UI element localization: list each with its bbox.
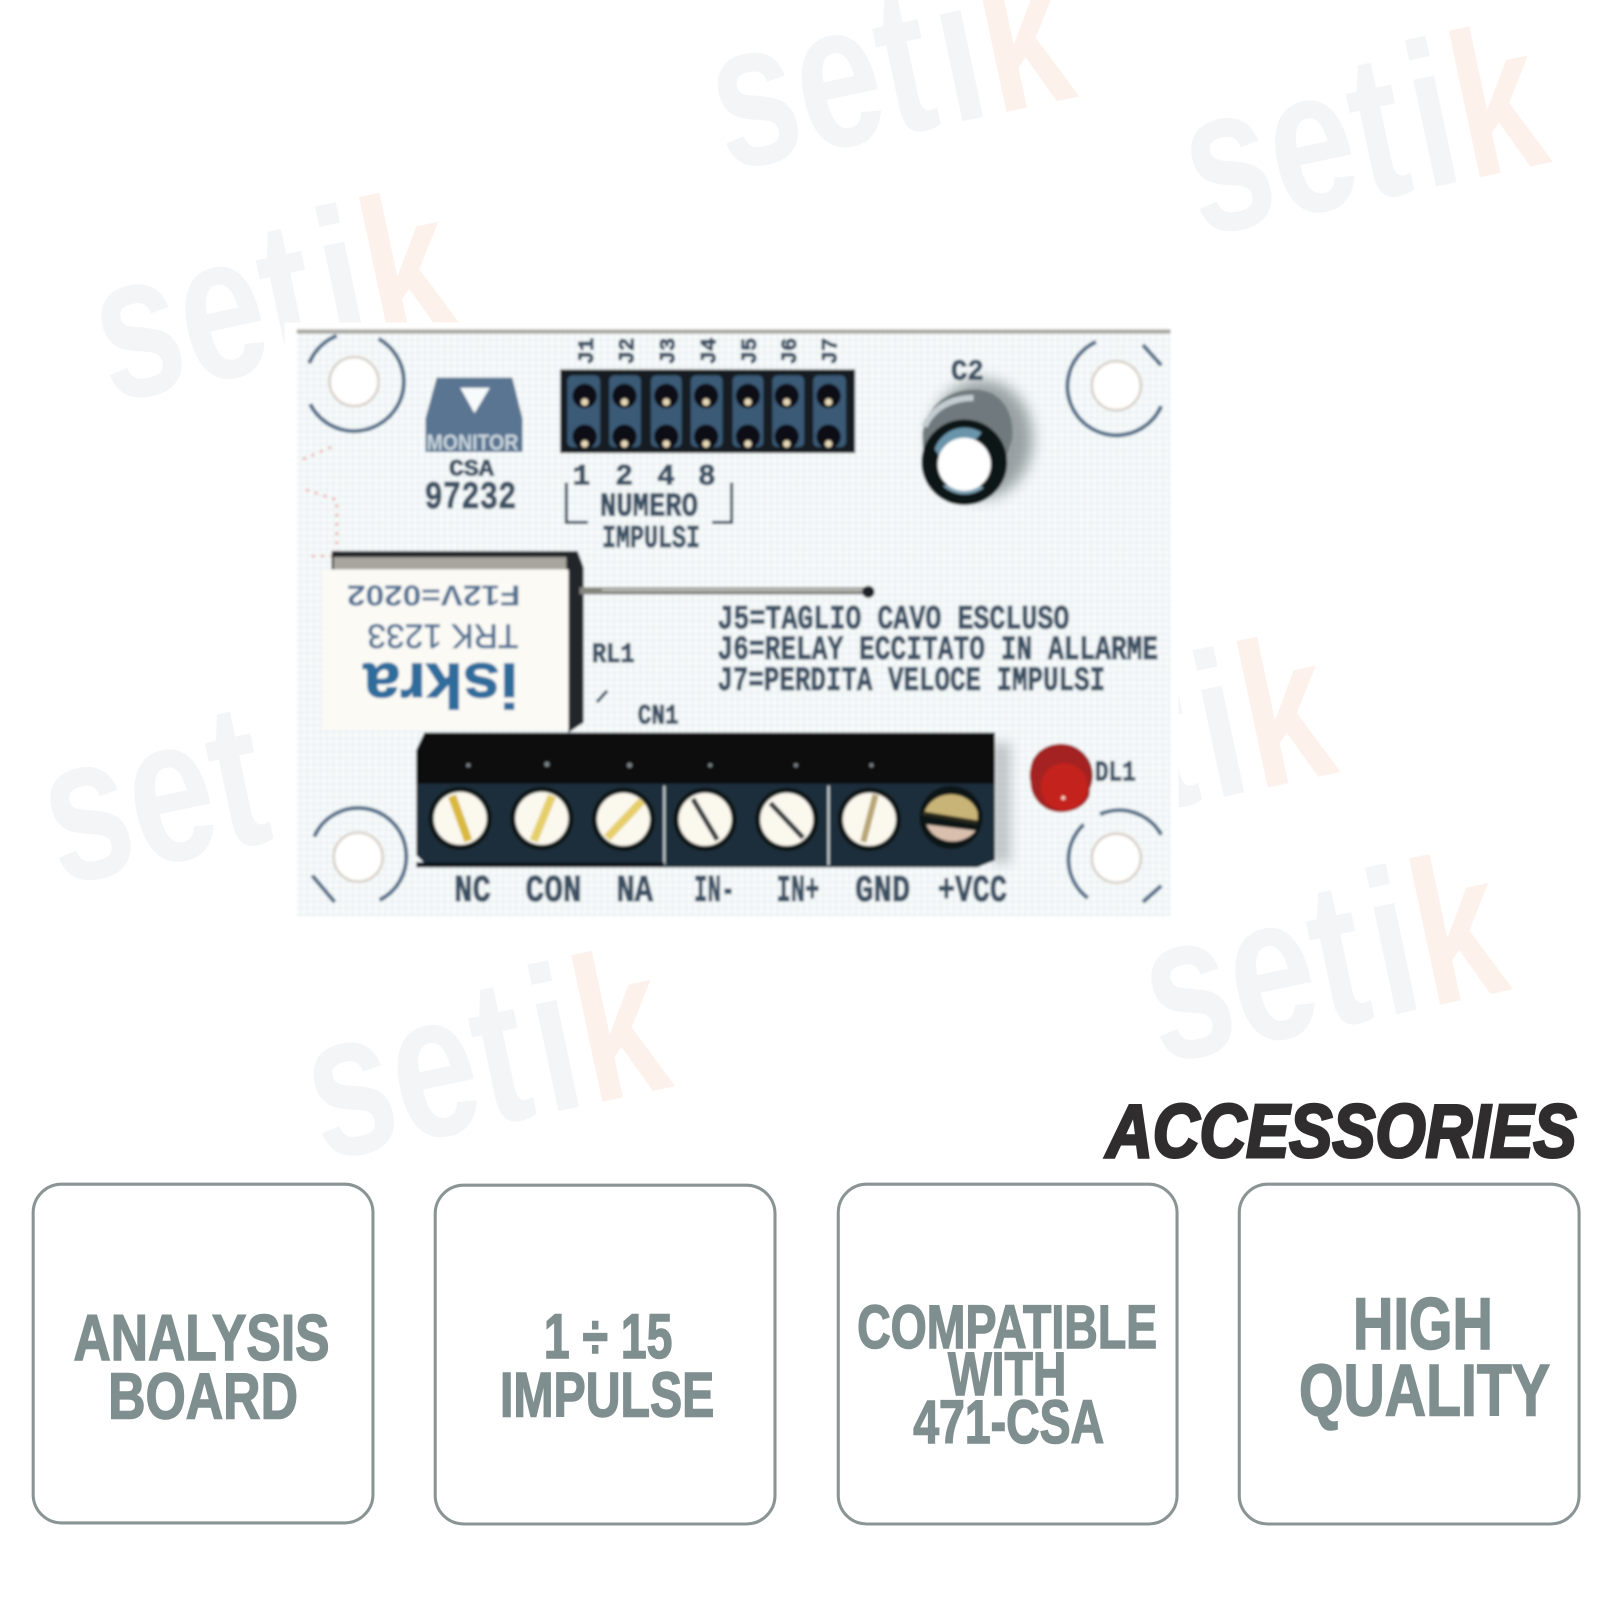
gold screw +VCC	[922, 794, 978, 841]
setik watermarks: set	[1161, 7, 1426, 280]
mounting hole bottom left	[312, 808, 406, 902]
relay printed text: iskra	[362, 649, 518, 719]
setik watermarks: set	[283, 932, 548, 1205]
setik watermarks: i	[509, 921, 599, 1157]
mounting hole top left	[309, 336, 404, 431]
terminal labels: IN+	[777, 871, 819, 913]
card: high quality	[1239, 1184, 1579, 1524]
jumper labels J1-J7	[574, 338, 844, 364]
terminal labels: NC	[454, 871, 491, 913]
LED DL1	[1030, 744, 1136, 812]
monitor csa logo: 97232	[424, 476, 516, 520]
setik watermarks: i	[1387, 0, 1476, 232]
card: impulse range	[435, 1185, 775, 1524]
card text: HIGH	[1353, 1282, 1493, 1365]
card text: WITH	[948, 1340, 1066, 1408]
mounting hole bottom right	[1068, 810, 1161, 902]
terminal labels: NA	[616, 871, 653, 913]
jumper labels J1-J7: J6	[777, 338, 803, 364]
jumper description text: J5=TAGLIO CAVO ESCLUSO	[717, 601, 1069, 640]
screw terminals	[429, 786, 983, 851]
setik watermarks: k	[1391, 806, 1523, 1050]
terminal labels	[454, 871, 1007, 913]
jumper description text	[717, 601, 1158, 701]
jumper description text: J7=PERDITA VELOCE IMPULSI	[717, 662, 1105, 701]
jumper labels J1-J7: J5	[737, 338, 763, 364]
capacitor C2: C2	[951, 356, 984, 389]
relay printed text: TRK 1233	[367, 616, 518, 654]
numero impulsi legend: 2	[615, 460, 633, 494]
card: compatibility	[838, 1184, 1177, 1524]
relay wire	[580, 586, 874, 598]
board surface	[297, 330, 1170, 916]
capacitor C2	[921, 356, 1033, 505]
card text	[73, 1301, 330, 1432]
board labels RL1 CN1	[592, 640, 679, 732]
monitor csa logo	[424, 378, 522, 520]
setik watermarks: set	[71, 174, 336, 446]
faint red dotted marks	[303, 447, 337, 556]
jumper labels J1-J7: J2	[615, 338, 641, 364]
jumper labels J1-J7: J3	[655, 338, 681, 364]
numero impulsi legend: 4	[657, 460, 675, 494]
numero impulsi legend: 1	[572, 460, 590, 494]
jumper labels J1-J7: J4	[696, 338, 722, 364]
jumper labels J1-J7: J1	[574, 338, 600, 364]
relay	[322, 551, 874, 733]
setik watermarks: set	[20, 656, 285, 929]
jumper description text: J6=RELAY ECCITATO IN ALLARME	[717, 631, 1158, 670]
card text: BOARD	[108, 1359, 298, 1432]
setik watermarks	[20, 0, 1563, 1205]
terminal labels: +VCC	[938, 871, 1007, 913]
terminal labels: CON	[526, 871, 582, 913]
setik watermarks: i	[1174, 607, 1264, 842]
jumper labels J1-J7: J7	[818, 338, 844, 364]
mounting hole top right	[1067, 342, 1161, 435]
setik watermarks: k	[1218, 588, 1350, 833]
circuit board photo	[297, 330, 1170, 916]
jumper header	[560, 369, 855, 453]
card text: 471-CSA	[913, 1388, 1104, 1456]
numero impulsi legend: IMPULSI	[602, 522, 700, 557]
card text: 1 ÷ 15	[544, 1302, 672, 1372]
card text: IMPULSE	[500, 1360, 714, 1430]
card text: COMPATIBLE	[857, 1293, 1157, 1361]
relay printed text	[347, 579, 520, 719]
card text	[500, 1302, 714, 1430]
monitor csa logo: CSA	[449, 457, 495, 484]
setik watermarks: i	[1347, 824, 1437, 1060]
board labels RL1 CN1: RL1	[592, 640, 635, 671]
card text: ANALYSIS	[73, 1301, 330, 1374]
card: analysis board	[33, 1184, 373, 1523]
setik watermarks: i	[297, 163, 387, 398]
relay printed text: F12V=0202	[347, 579, 520, 611]
LED DL1: DL1	[1095, 757, 1136, 790]
setik watermarks: set	[1121, 835, 1386, 1108]
numero impulsi legend: 8	[698, 460, 716, 494]
card text	[857, 1293, 1157, 1456]
numero impulsi legend: NUMERO	[600, 488, 698, 526]
setik watermarks: set	[949, 618, 1213, 890]
monitor csa logo: MONITOR	[427, 430, 518, 455]
terminal labels: GND	[855, 871, 910, 913]
setik watermarks: k	[553, 903, 685, 1147]
terminal block	[416, 733, 1010, 867]
numero impulsi legend	[566, 460, 732, 557]
terminal labels: IN-	[694, 871, 735, 913]
setik watermarks: k	[341, 145, 473, 389]
board labels RL1 CN1: CN1	[638, 701, 679, 732]
card text	[1299, 1282, 1550, 1431]
